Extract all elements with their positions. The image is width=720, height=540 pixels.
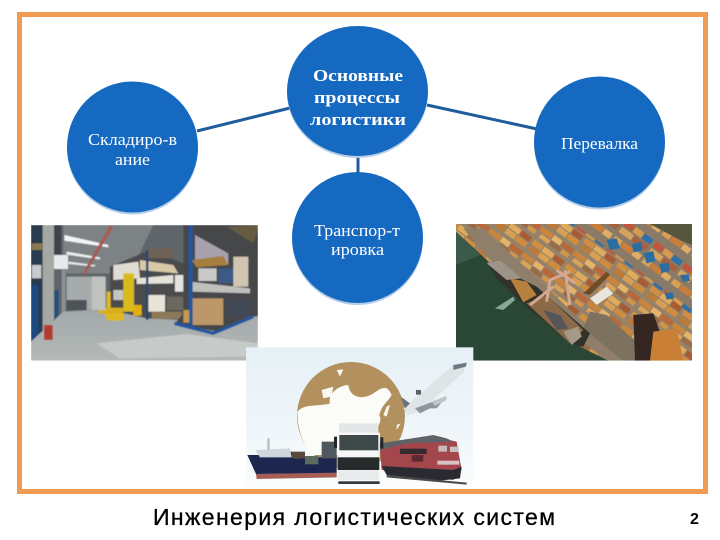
footer title: Инженерия логистических систем [153,504,555,530]
node: central process: логистики [310,110,406,129]
node: warehousing: Складиро-в [88,130,177,149]
node: central process: процессы [314,88,400,107]
node: warehousing: ание [115,150,150,169]
node: central process [287,26,428,158]
node: transportation: Транспор-т [314,221,400,240]
connector lines [197,105,537,173]
photo: warehouse [31,225,258,361]
node: central process: Основные [313,66,404,85]
node: transshipment: Перевалка [561,134,639,153]
train [380,437,462,480]
ship [247,452,337,474]
page number: 2 [690,511,699,528]
node: warehousing [67,82,198,214]
photo: container port [456,224,692,361]
plane [403,363,467,415]
node: transportation: ировка [331,240,385,259]
node: transportation [292,172,423,305]
photo: transport and globe [246,347,473,487]
node: transshipment [534,76,665,210]
globe [297,362,405,470]
truck [334,437,337,448]
